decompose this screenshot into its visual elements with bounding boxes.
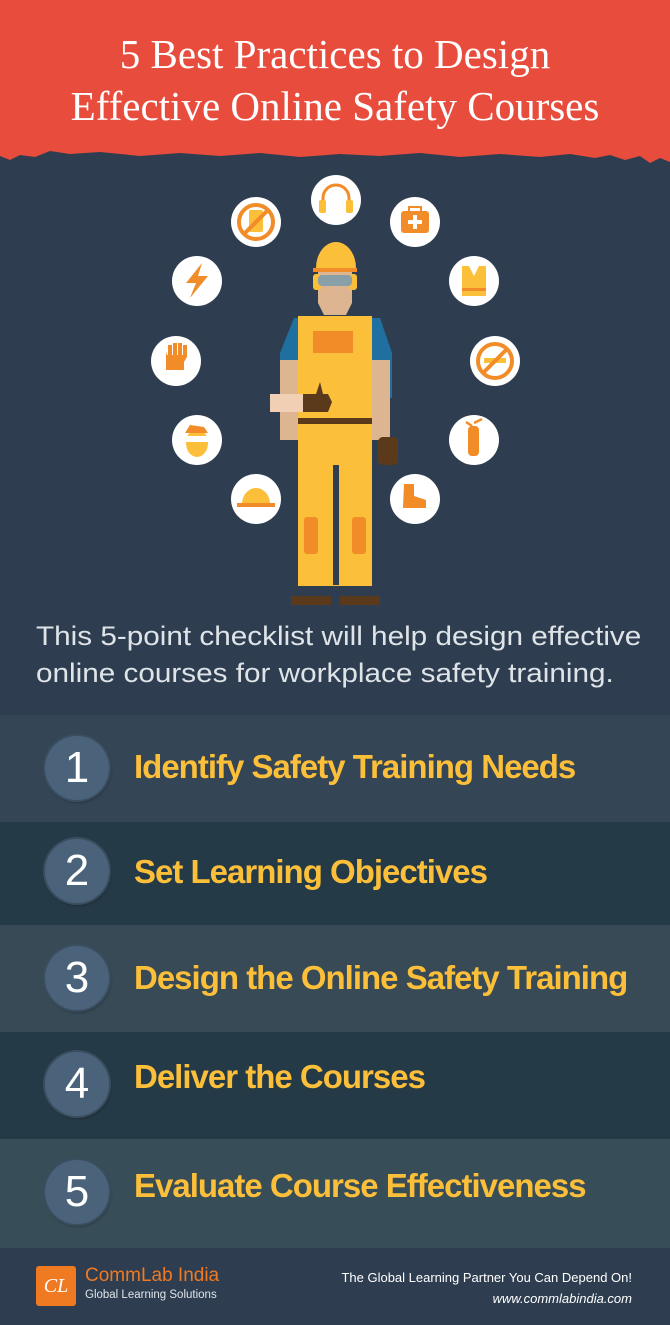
icon: extinguisher	[449, 415, 499, 465]
step 4: Deliver the Courses	[134, 1058, 425, 1095]
icon: helmet	[231, 474, 281, 524]
icon: no phone	[231, 197, 281, 247]
step 2	[0, 822, 670, 925]
logo: CL	[44, 1275, 68, 1297]
footer	[0, 1248, 670, 1325]
step 3: 3	[65, 953, 89, 1002]
step 3: Design the Online Safety Training	[134, 959, 627, 996]
icon: face with goggles	[172, 415, 222, 465]
step 1	[0, 715, 670, 822]
icon: no smoking	[470, 336, 520, 386]
icon: lightning	[172, 256, 222, 306]
icon: first aid	[390, 197, 440, 247]
step 1: Identify Safety Training Needs	[134, 748, 575, 785]
worker figure	[270, 242, 398, 605]
step 3	[0, 925, 670, 1032]
tagline: www.commlabindia.com	[493, 1291, 632, 1306]
footer: CommLab India	[85, 1265, 219, 1286]
icon: vest	[449, 256, 499, 306]
step 5	[0, 1139, 670, 1248]
step 5: 5	[65, 1167, 89, 1216]
logo	[36, 1266, 76, 1306]
intro text: This 5-point checklist will help design effective	[36, 621, 641, 651]
intro text	[36, 621, 641, 688]
illustration: worker with safety icons	[151, 175, 520, 605]
title	[71, 31, 599, 129]
step 5: Evaluate Course Effectiveness	[134, 1167, 586, 1204]
icon: headphones	[311, 175, 361, 225]
header banner	[0, 0, 670, 163]
step 2: 2	[65, 846, 89, 895]
step 4	[0, 1032, 670, 1139]
title: 5 Best Practices to Design	[120, 31, 550, 77]
step 1: 1	[65, 743, 89, 792]
step 2: Set Learning Objectives	[134, 853, 487, 890]
icon: glove	[151, 336, 201, 386]
icon: boot	[390, 474, 440, 524]
title: Effective Online Safety Courses	[71, 83, 599, 129]
intro text: online courses for workplace safety training.	[36, 658, 614, 688]
step 4: 4	[65, 1059, 89, 1108]
tagline: The Global Learning Partner You Can Depend On!	[341, 1270, 632, 1285]
footer: Global Learning Solutions	[85, 1289, 217, 1301]
tagline	[341, 1270, 632, 1306]
